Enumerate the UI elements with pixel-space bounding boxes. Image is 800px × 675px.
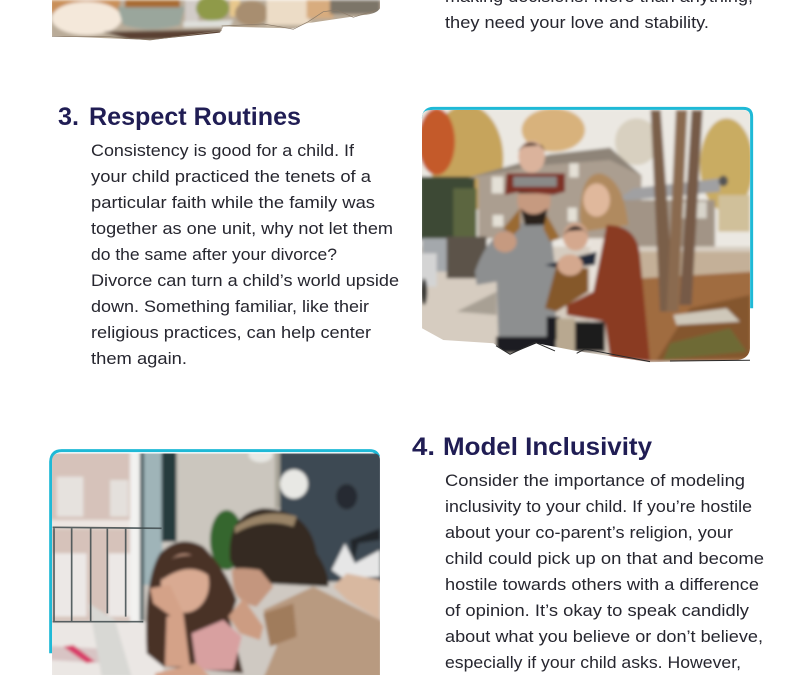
text: model inclusivity body: child could pick up on that and become	[445, 549, 764, 568]
mother and daughter photo	[50, 448, 383, 675]
text: respect routines body: them again.	[91, 349, 187, 368]
text: respect routines body: do the same after your divorce?	[91, 245, 337, 264]
text: model inclusivity body: about your co-parent’s religion, your	[445, 523, 733, 542]
photo: family in front of house	[418, 105, 753, 365]
text: model inclusivity body: inclusivity to your child. If you’re hostile	[445, 497, 752, 516]
text: model inclusivity body: about what you believe or don’t believe,	[445, 627, 763, 646]
family photo	[418, 105, 753, 365]
heading: 4. Model Inclusivity: 4.	[412, 433, 435, 461]
text: respect routines body: religious practices, can help center	[91, 323, 371, 342]
heading: 3. Respect Routines: Respect Routines	[89, 103, 301, 131]
text: model inclusivity body: hostile towards others with a difference	[445, 575, 759, 594]
text: respect routines body: your child practiced the tenets of a	[91, 167, 372, 186]
photo: food table	[50, 0, 383, 42]
mother	[230, 508, 328, 587]
toddler on shoulders	[505, 173, 565, 195]
cyan photo frame	[51, 451, 379, 653]
text: model inclusivity body: especially if your child asks. However,	[445, 653, 741, 672]
torn edge squiggle	[496, 342, 750, 362]
text: top right continuation: they need your love and stability.	[445, 13, 709, 32]
text: respect routines body	[91, 141, 399, 368]
photo: mother and daughter on bed	[50, 448, 383, 675]
wavy torn edge line	[52, 10, 377, 40]
heading: 4. Model Inclusivity: Model Inclusivity	[443, 433, 652, 461]
text: respect routines body: together as one unit, why not let them	[91, 219, 393, 238]
heading: 3. Respect Routines: 3.	[58, 103, 79, 131]
text: respect routines body: Consistency is good for a child. If	[91, 141, 354, 160]
text: model inclusivity body	[445, 471, 764, 672]
man	[475, 223, 557, 340]
text: respect routines body: particular faith while the family was	[91, 193, 375, 212]
text: respect routines body: Divorce can turn a child’s world upside	[91, 271, 399, 290]
girl	[146, 541, 243, 673]
text: respect routines body: down. Something familiar, like their	[91, 297, 369, 316]
balcony railing	[53, 527, 162, 622]
baby	[563, 223, 588, 251]
text: top right continuation	[445, 0, 753, 32]
cyan photo frame	[423, 108, 752, 308]
woman	[580, 173, 628, 232]
text: model inclusivity body: Consider the importance of modeling	[445, 471, 745, 490]
text: model inclusivity body: of opinion. It’s okay to speak candidly	[445, 601, 750, 620]
